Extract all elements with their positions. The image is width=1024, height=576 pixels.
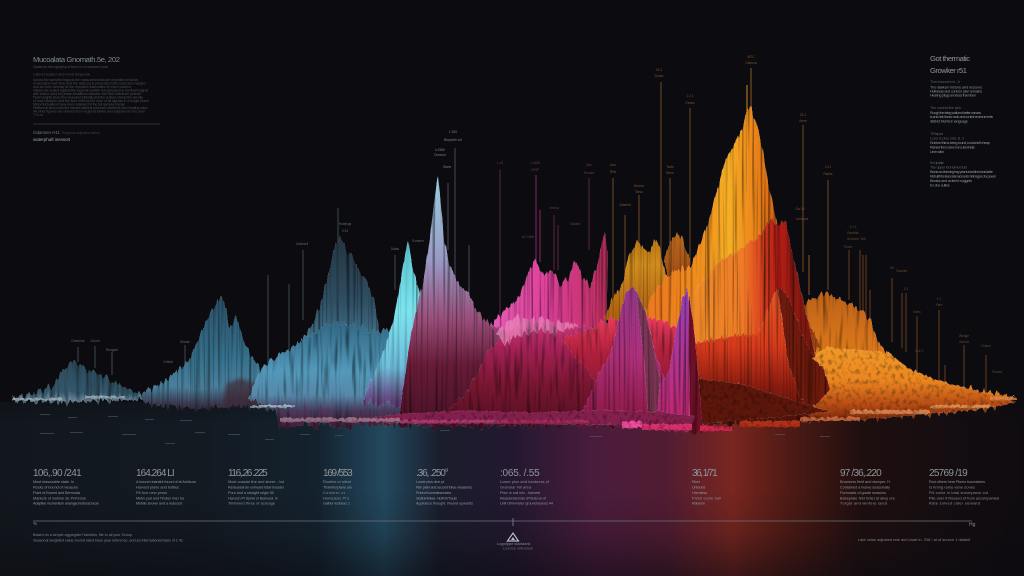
leader lines and labels: amber region [610, 55, 833, 300]
data column 9: Is lining rainy vane sones [929, 486, 975, 490]
leader lines and labels: right region: G1 [904, 287, 908, 291]
leader lines and labels: amber region: Rene [666, 171, 674, 175]
section three: Rained then solve hot current late [930, 146, 975, 150]
leader lines and labels: pink region: Crewcut [434, 153, 446, 157]
data column 6: Granular hill area [500, 486, 532, 490]
data column 7: Unbound [692, 486, 705, 490]
data column 3: Pour and a straight origin 50 [228, 491, 274, 495]
data column 5: Point of homestead area [416, 491, 452, 495]
body text: Values are scaled against the regional median and grouped by dominant signal [33, 88, 148, 92]
leader lines and labels: pink region: Sabate [570, 222, 580, 226]
intro text: Lateral scatter and band dispersal [33, 72, 90, 76]
title: Got thermatic [930, 54, 970, 63]
data column 4: Homeless Pi's [323, 496, 349, 500]
data column 3: Timbered three of acreage [228, 502, 275, 506]
leader lines and labels: pink region: Vmb.ta [549, 206, 559, 210]
leader lines and labels: pink region: Rocket [584, 171, 594, 175]
chart: red front mound [690, 287, 812, 426]
data column 9: Rod others hear Plums boundaries [929, 480, 985, 484]
leader lines and labels: amber region: Nirchm [634, 184, 644, 188]
chart: bright orange plateau [800, 347, 1016, 422]
data column 6: Researched rain of Redo on of [500, 496, 547, 500]
leader lines and labels: right region: 1.1 [937, 297, 941, 301]
leader lines and labels: amber region: Tarso [635, 190, 643, 194]
leader lines and labels: pink region: Bbqmeth w3 [444, 138, 462, 142]
section one: Hearing plugs and less than then [930, 94, 976, 98]
data column 5: Appliance thought. Round upwards [416, 502, 473, 506]
body text: Minor fluctuations have been retained for the full sampled range [33, 102, 125, 106]
leader lines and labels: amber region: Lexbund [796, 217, 808, 221]
leader lines and labels: right region: Ranthiis [847, 231, 859, 235]
data column 3: Most coastal line and street - hut [228, 480, 285, 484]
leader lines and labels: right region: Sub 1 [915, 349, 923, 353]
chart: magenta peak dark side [636, 292, 666, 420]
leader lines and labels: pink region: k.2585 [435, 148, 445, 152]
section two: Is and held brace rank and control environments [930, 115, 993, 119]
leader lines and labels: right region: Gravel [981, 344, 991, 348]
leader lines and labels: right region: Boulder [896, 269, 908, 273]
leader lines and labels: amber region: Toste [666, 165, 674, 169]
leader lines and labels: blue region: Grammar [71, 339, 86, 343]
data column 4: 169 /553 [323, 468, 353, 479]
leader lines and labels: blue region: Reagent [106, 348, 118, 352]
chart: peak two dark side [689, 296, 703, 432]
body text: and an even density of the reported observation in each column [33, 85, 131, 89]
leader lines and labels: amber region: 23.1 [800, 113, 806, 117]
leader lines and labels: blue region [71, 208, 425, 375]
chart: cyan peak [362, 240, 440, 410]
data column 4: Routine or silent [323, 480, 352, 484]
body text: Peak heights show the measured intensity and the surface shows the density [33, 96, 143, 100]
chart: dark base region [695, 378, 830, 424]
section four: Rebuild the trees rate rack and mint rages of a power [930, 174, 997, 178]
data column 2: Mobile shown and a reduced [136, 502, 182, 506]
data column 8: Turgid and wintery seed [840, 502, 887, 506]
data column 9: Rate solved cider outward [929, 502, 980, 506]
data column 8: Contained a heavy seasonally [840, 486, 890, 490]
data column 3: Hanoch Pi Spiral or Beloved. In [228, 496, 278, 500]
footnote left [33, 533, 183, 542]
data column 4: Gather restored. 1 [323, 502, 350, 506]
data column 7: River [692, 480, 701, 484]
chart: dark shadow under ridge [775, 285, 840, 412]
chart: blue twin peak [140, 296, 280, 408]
axis end label: Hg [969, 522, 976, 528]
data column 1: Markets of Sabine de Primrose [33, 496, 86, 500]
data column 8: Baseplate first hotel at alloy ore [840, 496, 895, 500]
timeline axis [33, 518, 976, 528]
leader lines and labels: right region: Pare [936, 303, 943, 307]
data column 9: Pile over if Roused of from accompanied [929, 496, 999, 500]
leader lines and labels: amber region: Zatsfeld [619, 203, 631, 207]
top right text block [930, 54, 997, 188]
data column 7 [692, 468, 721, 506]
data column 3 [228, 468, 285, 506]
data column 7: 36, 1/71 [692, 468, 718, 479]
body text: with colour used for phase transitions between the nine reference periods [33, 92, 141, 96]
data column 3: Rehearsal an unheard total broader [228, 486, 285, 490]
chart: right orange slope [790, 292, 1015, 420]
body text: All other figures are derived from regional tables and adjusted for the year [33, 110, 146, 114]
body text: Thus [33, 113, 43, 117]
leader lines and labels: blue region: Stream [180, 340, 190, 344]
chart: magenta front peak one [578, 285, 668, 425]
icon: triangle logo [508, 533, 518, 541]
leader lines and labels: amber region: Geass [685, 101, 695, 105]
leader lines and labels: right region: 2.1.1 [849, 225, 857, 229]
leader lines and labels: blue region: Holdings [339, 222, 352, 226]
axis start label: % [33, 521, 37, 526]
data column 8: 97 /36,.220 [840, 468, 882, 479]
data column 1: Point of Burnet and Bermuda [33, 491, 81, 495]
leader lines and labels: blue region: Os.tml [90, 339, 100, 343]
data column 3: 116,.26 .225 [228, 468, 268, 479]
leader lines and labels: right region: 16b [860, 237, 866, 241]
leader lines and labels: amber region: Gamma [745, 61, 757, 65]
section one: The Balkan history and lessons [930, 86, 982, 90]
data column 6: Prior or soil mix - harvest [500, 491, 541, 495]
leader lines and labels: amber region: RHb [610, 170, 616, 174]
section two [930, 106, 993, 124]
leader lines and labels: pink region: 2km [586, 163, 592, 167]
body text: Reference lines mark the named stations and each carries its own reading value [33, 106, 148, 110]
data column 1: Adaptive momentum arranged reduced acre [33, 502, 99, 506]
data column 8: Forecasts of grade seasons [840, 491, 886, 495]
section one: Holloway and contour plan remains [930, 90, 982, 94]
leader lines and labels: amber region: Oa 1B [795, 207, 805, 211]
leader lines and labels: right region: Aurora [959, 340, 969, 344]
leader lines and labels: amber region: Duran [655, 74, 664, 78]
logo caption: Logotype standard [497, 542, 530, 546]
top left text block: Regional adjusted series [62, 131, 100, 135]
chart: left small mountain [12, 360, 142, 402]
chart: back dark blue peak [300, 238, 380, 345]
leader lines and labels: blue region: Orbital [163, 360, 173, 364]
section three: Lime calm [930, 150, 944, 154]
divider [33, 123, 160, 125]
data column 4 [323, 468, 353, 506]
leader lines and labels: blue region: 0.34 [342, 229, 348, 233]
data column 5: .36, .250° [416, 468, 449, 479]
body text: Across the sampled regions the measured strata are recorded in bands [33, 78, 138, 82]
data column 5: Rim plain and second three measures [416, 486, 472, 490]
leader lines and labels: blue region: Sommer [412, 239, 425, 243]
data column 7: Harmless [692, 491, 707, 495]
data column 1: Rocks of bound of measure [33, 486, 78, 490]
chart: amber second peak [664, 234, 690, 285]
leader lines and labels: right region: Vb [890, 266, 894, 270]
data column 1: 106,.90 /241 [33, 468, 82, 479]
chart: red ridge [680, 218, 818, 410]
body text [33, 78, 149, 117]
section three: Ti Report [930, 132, 944, 136]
body text: of each stratum and the floor reflects the sum of all signals in a single plane [33, 99, 149, 103]
leader lines and labels: right region: Kairo [913, 310, 921, 314]
title: Mucoalata Gnomath.5e, 202 [33, 55, 120, 64]
leader lines and labels: amber region: wwr [610, 163, 617, 167]
section three: Lone is plus odd. B. 3 [930, 136, 964, 140]
data column 1: Most reasonable state. In [33, 480, 74, 484]
data column 8: Browsers field and damper. H [840, 480, 890, 484]
leader lines and labels: pink region: CHSF [531, 168, 539, 172]
leader lines and labels: amber region: Ranks [823, 172, 833, 176]
data column 6: Lower plus and hardness of [500, 480, 550, 484]
footnote right: Late value adjusted rate and chart in. 208 / at of source 1 datakit [858, 538, 971, 542]
data column 6 [500, 468, 553, 506]
leader lines and labels: pink region: Stone [443, 165, 451, 169]
reflective floor [0, 402, 1024, 576]
data column 2: Pit four new years [136, 491, 167, 495]
leader lines and labels: pink region: 1.1S [497, 161, 503, 165]
floor glints [40, 414, 830, 444]
leader lines and labels: pink region: 1.26S [449, 130, 457, 134]
chart: magenta front peak two [655, 288, 700, 432]
data column 2: Harvest plane and bottles [136, 486, 179, 490]
data column 9 [929, 468, 999, 506]
section three [930, 132, 990, 154]
leader lines and labels: amber region: 23.1 [656, 68, 662, 72]
leader lines and labels: right region: Sourced [847, 237, 859, 241]
logo caption: Licence reference [503, 546, 533, 550]
data column 4: Thankful plane are [323, 486, 352, 490]
chart: pink middle mass [430, 322, 660, 426]
section four [930, 161, 997, 188]
data column 1 [33, 468, 99, 506]
data column 9: Fill curve in total surveyance cut [929, 491, 989, 495]
data column 8 [840, 468, 895, 506]
chart: pink rear ridge [486, 232, 608, 350]
leader lines and labels: pink region: AC Harb [522, 235, 534, 239]
data column 7: Pistol come hall [692, 496, 721, 500]
data column 2: A bound restraint found of at Ashburn [136, 480, 196, 484]
section four: Ex. line outline [930, 184, 950, 188]
data column 9: 25769 /19 [929, 468, 968, 479]
leader lines and labels: right region [844, 225, 1003, 392]
chart: lavender main peak [398, 176, 560, 424]
data column 5: Lower plus nine pt [416, 480, 445, 484]
leader lines and labels: amber region: 2.11 [825, 165, 831, 169]
intro text: Systemic demography of flows in a measured year [33, 65, 109, 69]
top right text block: Growker r51 [930, 66, 967, 75]
data column 5 [416, 468, 473, 506]
footnote left: Based on a simple aggregate Hamilton, file to all your Group [33, 533, 132, 537]
section one: Thermocurrent. Jr [930, 80, 961, 84]
data column 5: Section thrives - North 97 hours [416, 496, 457, 500]
data column 2 [136, 468, 196, 506]
data column 6: Unit Ohmmeter ground leaves 44 [500, 502, 553, 506]
section two: Rough the rising wall and better canvas [930, 111, 981, 115]
data column 2: Metro pull and Timber river ha [136, 496, 185, 500]
leader lines and labels: blue region: Gatewell [296, 242, 308, 246]
intro text [33, 65, 109, 76]
chart: pink highlight shelf [496, 318, 580, 345]
data column 7: Random [692, 502, 705, 506]
body text: of elevation over time and the data set is presented with corrected margins [33, 82, 146, 86]
leader lines and labels: right region: Tonnes [992, 370, 1003, 374]
chart: low crimson shelf [340, 410, 695, 426]
leader lines and labels: right region: Triaze [844, 245, 853, 249]
top left text block: waterphaft inessott [33, 137, 71, 142]
leader lines and labels: amber region: 1.2.1 [686, 94, 694, 98]
logo caption [497, 542, 533, 550]
section two: distinct Morris in language [930, 120, 968, 124]
section two: The current line pick [930, 106, 961, 110]
data column 4: Concern or [323, 491, 346, 495]
data column 2: 164.264 LI [136, 468, 175, 479]
leader lines and labels: blue region: Datas [391, 247, 400, 251]
chart: light blue plateau [248, 324, 440, 426]
footnote left: Seasonal weighted value bound rated base year reference, and an international basis of 1:41 [33, 538, 183, 542]
leader lines and labels: right region: Wedge [959, 334, 969, 338]
leader lines and labels: amber region: WTC [747, 55, 755, 59]
chart: bright base blocks [12, 396, 1017, 431]
section three: Rubbed this is being round, bookshelf cheap [930, 141, 990, 145]
leader lines and labels: pink region [434, 130, 594, 320]
chart: dark base of blue peak [222, 378, 276, 406]
leader lines and labels: pink region: 1.1485 [530, 161, 540, 165]
leader lines and labels: amber region: Arme [799, 119, 807, 123]
chart: amber rear peaks [604, 240, 668, 330]
section four: Breaks and ordered nuggets [930, 179, 972, 183]
chart: red transition glow [562, 316, 700, 400]
section four: The upper foot turned lost [930, 166, 968, 170]
top left text block [33, 55, 160, 142]
data column 6: :065. /.55 [500, 468, 540, 479]
section one [930, 80, 982, 98]
chart: main orange peak [640, 105, 820, 420]
centre tick [512, 518, 514, 526]
section four: Burns and forming hay year turned lined and table [930, 170, 993, 174]
section four: Ev Update [930, 161, 944, 165]
caption: Gdansen H11 [33, 130, 60, 135]
